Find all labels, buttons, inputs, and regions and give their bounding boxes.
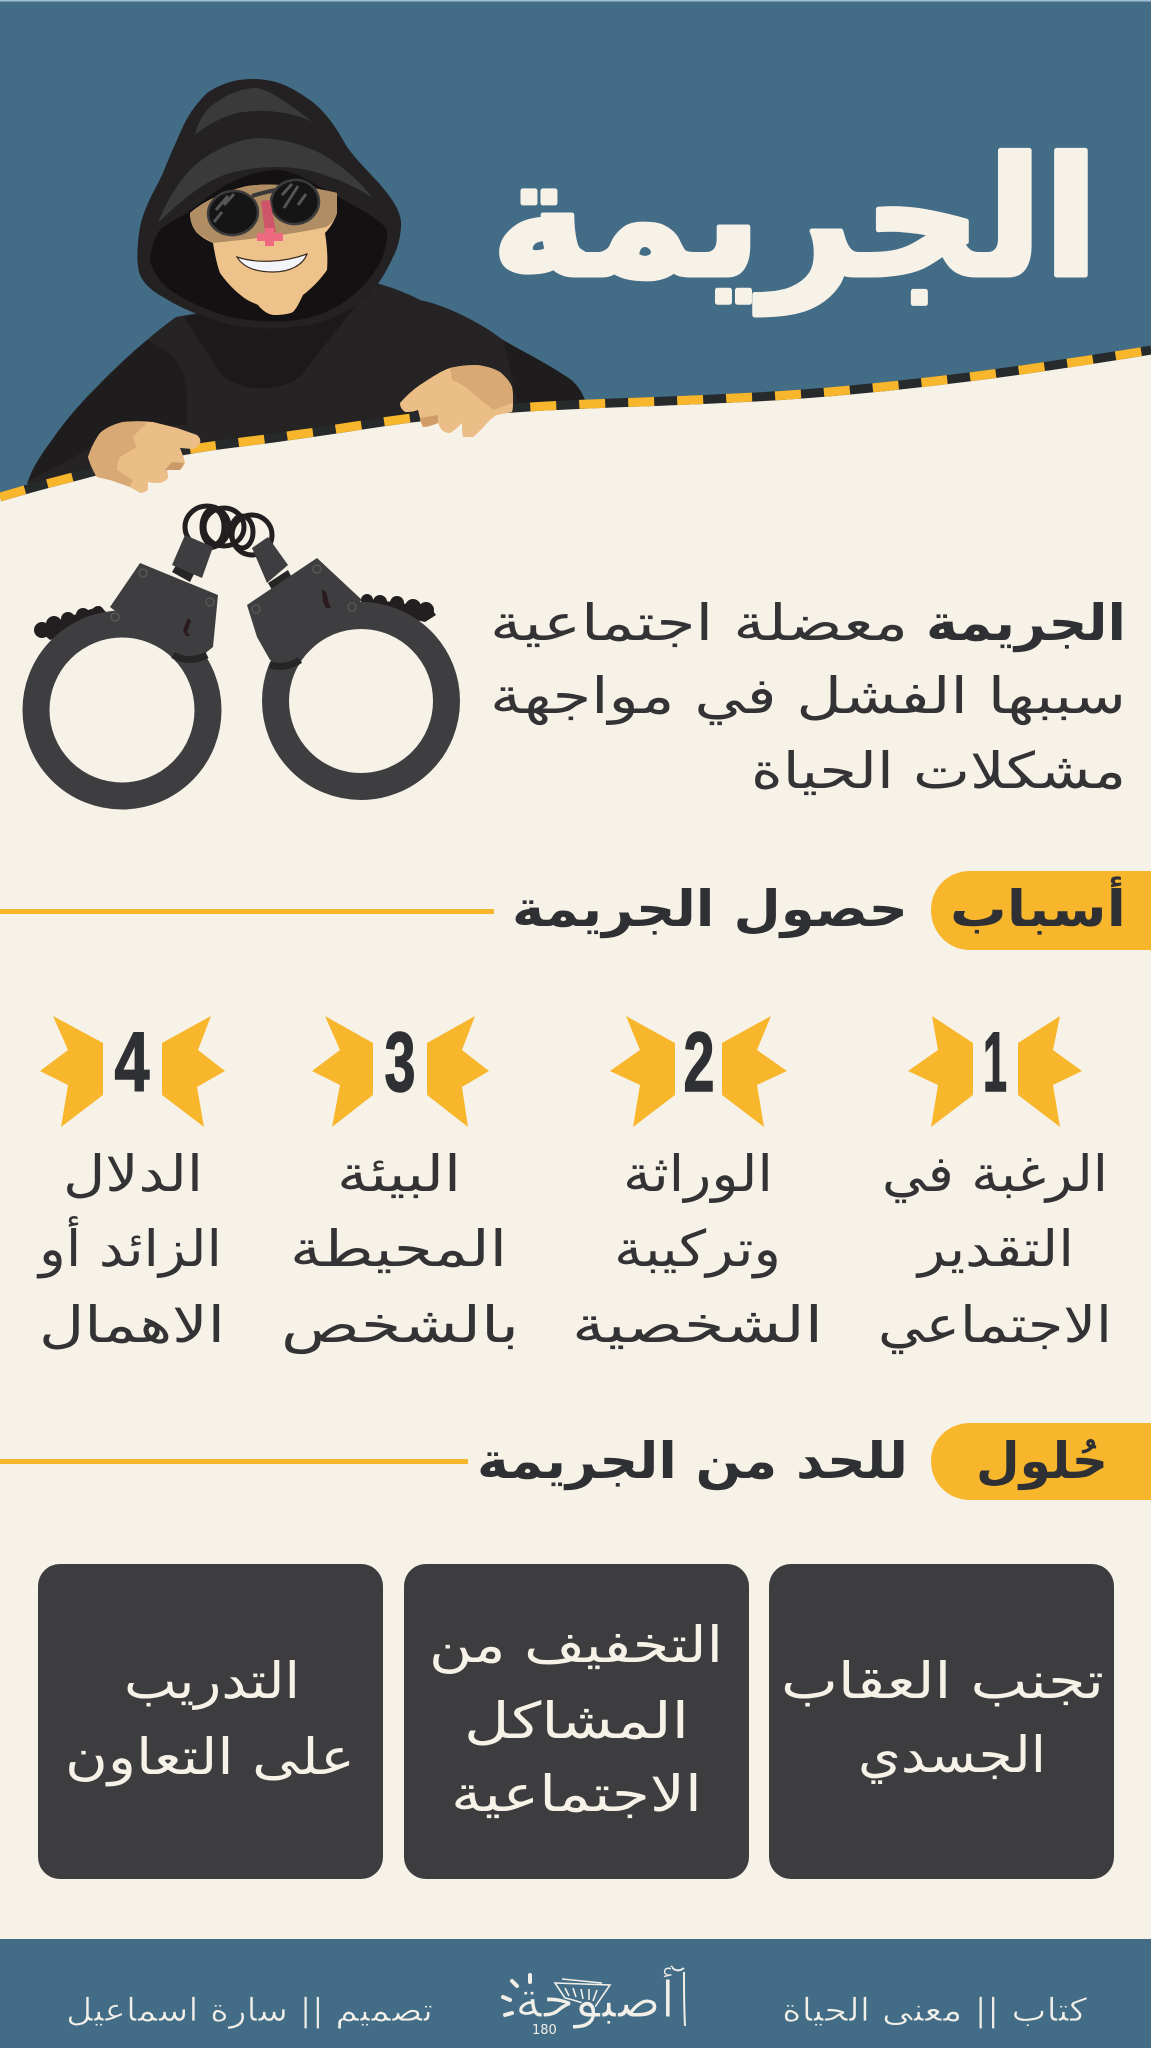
intro paragraph: الجريمة — [926, 594, 1126, 653]
cause 4: الزائد أو — [36, 1216, 222, 1279]
badge 3 — [312, 1015, 489, 1127]
cause 1: الاجتماعي — [878, 1296, 1112, 1354]
footer logo: 180 — [532, 2023, 557, 2038]
section heading: solutions: حُلول — [976, 1432, 1108, 1491]
footer credit: design: تصميم || سارة اسماعيل — [66, 1991, 433, 2029]
smile — [237, 254, 307, 272]
section heading: causes — [0, 871, 1151, 950]
section heading: causes: حصول الجريمة — [512, 880, 908, 939]
cause 2: الوراثة — [623, 1145, 773, 1203]
intro paragraph: مشكلات الحياة — [751, 742, 1126, 800]
badge 2 — [610, 1015, 787, 1127]
illustration: hood — [137, 79, 401, 328]
badge 2: 2 — [684, 1015, 714, 1109]
illustration: hooded criminal body — [27, 282, 600, 484]
cause 4 — [36, 1015, 225, 1354]
intro paragraph: معضلة اجتماعية — [490, 594, 908, 652]
solution card 3: على التعاون — [65, 1728, 355, 1787]
solution card 1: تجنب العقاب — [781, 1652, 1104, 1710]
nose with pink scar — [257, 200, 283, 246]
illustration: face — [190, 177, 337, 315]
badge 1: 1 — [983, 1015, 1007, 1109]
cause 3: بالشخص — [281, 1296, 519, 1354]
solution card 3 — [38, 1564, 383, 1879]
cause 3 — [281, 1015, 519, 1354]
badge 3: 3 — [384, 1015, 416, 1109]
right cuff — [247, 537, 446, 786]
footer — [0, 1939, 1151, 2048]
section heading: solutions: للحد من الجريمة — [477, 1432, 908, 1491]
chain rings — [185, 506, 272, 555]
cause 1: الرغبة في — [882, 1145, 1108, 1203]
badge 1 — [908, 1015, 1082, 1127]
cause 3: البيئة — [337, 1145, 461, 1203]
sunglasses — [205, 177, 322, 238]
dashed edge and cream page — [0, 350, 1151, 560]
section heading: causes: أسباب — [950, 876, 1126, 938]
solution card 3: التدريب — [124, 1652, 300, 1710]
cause 4: الاهمال — [39, 1296, 225, 1354]
section heading: solutions — [0, 1423, 1151, 1500]
cause 4: الدلال — [63, 1145, 203, 1203]
cause 2 — [572, 1015, 823, 1354]
footer logo: أصبوحة — [515, 1967, 675, 2029]
intro paragraph — [490, 594, 1126, 800]
left cuff — [34, 535, 218, 796]
badge 4 — [40, 1015, 225, 1127]
footer credit: book: كتاب || معنى الحياة — [782, 1991, 1088, 2029]
badge 4: 4 — [114, 1015, 150, 1109]
cause 2: الشخصية — [572, 1296, 823, 1354]
solution card 1: الجسدي — [858, 1726, 1046, 1784]
cause 2: وتركيبة — [614, 1220, 781, 1279]
cause 1 — [878, 1015, 1112, 1354]
illustration: right hand — [400, 365, 513, 437]
solution card 2: التخفيف من — [429, 1616, 723, 1674]
header banner — [0, 0, 1151, 497]
solution card 1 — [769, 1564, 1114, 1879]
footer logo — [503, 1966, 685, 2038]
solution card 2: المشاكل — [464, 1692, 689, 1750]
solution card 2: الاجتماعية — [451, 1765, 702, 1823]
cause 1: التقدير — [915, 1220, 1074, 1278]
cause 3: المحيطة — [290, 1220, 507, 1278]
solution card 2 — [404, 1564, 749, 1879]
illustration: left hand — [88, 421, 200, 493]
intro paragraph: سببها الفشل في مواجهة — [490, 667, 1126, 726]
title: الجريمة — [491, 123, 1099, 315]
handcuffs icon — [34, 506, 446, 796]
